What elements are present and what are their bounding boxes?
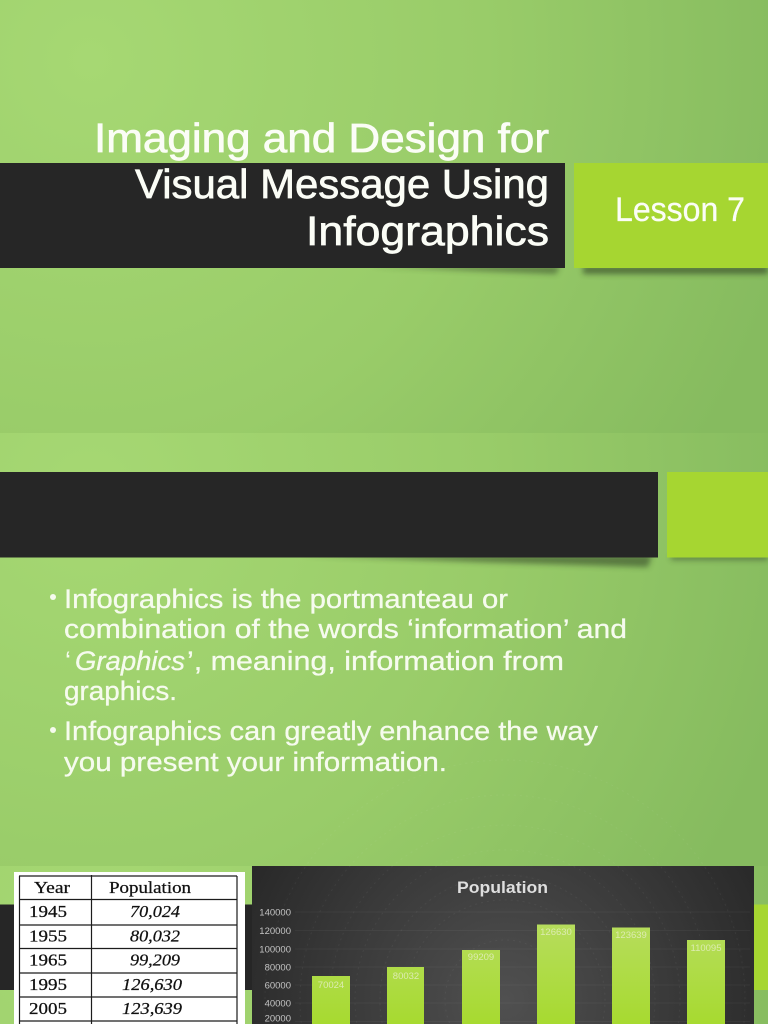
table population values: 123,639 bbox=[122, 999, 183, 1018]
bar chart bbox=[252, 760, 754, 1024]
bullet 2: Infographics can greatly enhance the way bbox=[64, 716, 599, 746]
table population values bbox=[122, 902, 183, 1018]
table years bbox=[29, 902, 67, 1018]
title: Visual Message Using bbox=[135, 161, 549, 207]
table years: 1945 bbox=[29, 902, 67, 921]
table years: 2005 bbox=[29, 999, 67, 1018]
bullet 1: ‘ bbox=[65, 646, 71, 676]
table years: 1955 bbox=[29, 926, 67, 946]
slide 2 empty heading band bbox=[0, 472, 658, 567]
table header bbox=[34, 878, 192, 897]
slide 3 dark band bbox=[0, 904, 768, 990]
slide 1 background bbox=[0, 0, 768, 433]
title bbox=[94, 115, 549, 254]
chart title: Population bbox=[457, 878, 548, 897]
bars bbox=[312, 924, 725, 1024]
table population values: 80,032 bbox=[130, 926, 181, 946]
table population values: 70,024 bbox=[130, 902, 181, 921]
title: Infographics bbox=[306, 208, 549, 254]
y axis labels: 120000 bbox=[259, 926, 291, 937]
y axis labels: 100000 bbox=[259, 944, 291, 956]
slide 1 lesson block bbox=[574, 163, 768, 274]
slide 3 lime block bbox=[740, 904, 768, 990]
lesson label: Lesson 7 bbox=[615, 191, 745, 229]
data labels: 70024 bbox=[318, 980, 344, 991]
y axis labels: 80000 bbox=[265, 962, 291, 974]
table years: 1995 bbox=[29, 975, 67, 994]
bullet 1: graphics. bbox=[64, 676, 177, 706]
y axis labels bbox=[259, 908, 291, 1024]
table years: 1965 bbox=[29, 950, 67, 970]
y axis labels: 40000 bbox=[265, 998, 291, 1010]
data labels: 126630 bbox=[540, 927, 572, 938]
data labels: 110095 bbox=[690, 943, 722, 954]
table grid bbox=[19, 875, 237, 1024]
bullet 1 bbox=[50, 584, 627, 706]
bullet 1: ’, meaning, information from bbox=[187, 646, 564, 676]
slide 1 title band bbox=[0, 163, 565, 274]
y axis labels: 60000 bbox=[265, 980, 291, 992]
bullet 1: combination of the words ‘information’ and bbox=[64, 614, 627, 644]
data labels: 123639 bbox=[615, 930, 647, 941]
slide 2 lime block bbox=[667, 472, 768, 560]
population table bbox=[14, 872, 245, 1024]
table population values: 126,630 bbox=[122, 975, 183, 994]
table header: Year bbox=[34, 878, 70, 897]
data labels bbox=[318, 927, 722, 991]
bullet 1: Graphics bbox=[75, 646, 185, 676]
bullet 2: you present your information. bbox=[64, 747, 447, 777]
y axis labels: 140000 bbox=[259, 908, 291, 918]
bullet 2 bbox=[50, 716, 599, 777]
slide 3 background bbox=[0, 866, 768, 1024]
body text bbox=[50, 584, 627, 777]
bullet 1: Infographics is the portmanteau or bbox=[64, 584, 508, 614]
table population values: 99,209 bbox=[130, 950, 181, 970]
slide 2 background bbox=[0, 433, 768, 866]
title: Imaging and Design for bbox=[94, 115, 549, 161]
table header: Population bbox=[109, 878, 192, 897]
data labels: 80032 bbox=[393, 971, 419, 982]
data labels: 99209 bbox=[468, 952, 494, 963]
